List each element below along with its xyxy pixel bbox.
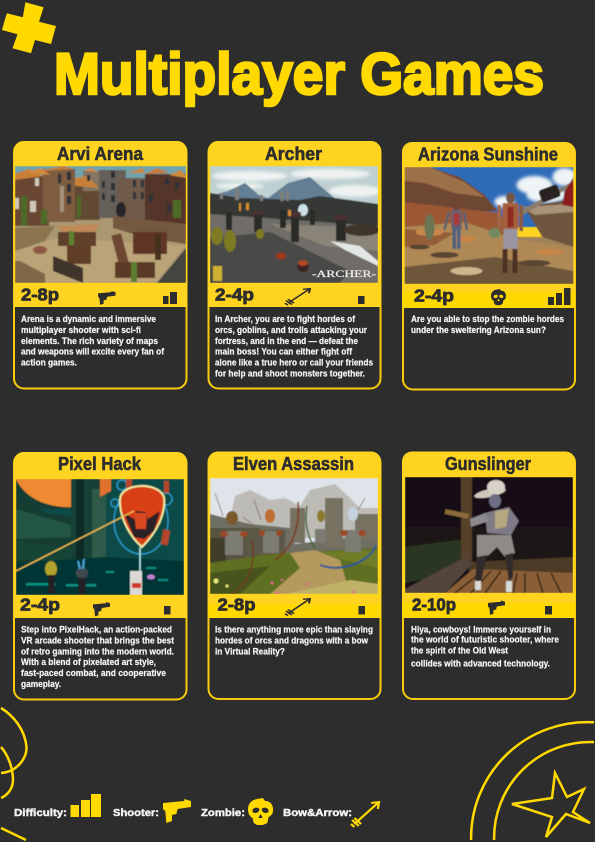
- description: [215, 314, 373, 378]
- legend: bow and arrow: Bow&Arrow:: [283, 807, 352, 819]
- description: [21, 314, 164, 368]
- heading: Gunslinger: [445, 454, 531, 474]
- description: Hiya, cowboys! Immerse yourself in: [411, 624, 551, 634]
- panel: Gunslinger: [402, 452, 575, 699]
- description: Step into PixelHack, an action-packed: [21, 624, 172, 634]
- heading: Elven Assassin: [233, 454, 354, 474]
- player count: 2-4p: [20, 595, 60, 615]
- player count: 2-4p: [215, 285, 254, 305]
- description: gameplay.: [21, 679, 61, 689]
- decorative scribble: [1, 708, 27, 840]
- icon: shooter: [488, 600, 505, 615]
- icon: shooter: [98, 291, 116, 305]
- player count: 2-8p: [21, 285, 59, 305]
- player count: 2-8p: [218, 595, 256, 615]
- description: of retro gaming into the modern world.: [21, 646, 174, 656]
- difficulty bars: [163, 292, 177, 304]
- description: Is there anything more epic than slaying: [215, 624, 373, 634]
- description: orcs, goblins, and trolls attacking your: [215, 325, 368, 335]
- description: the spirit of the Old West: [411, 646, 508, 656]
- description: alone like a true hero or call your friends: [215, 358, 373, 368]
- game image: [404, 167, 574, 284]
- game image: [16, 479, 184, 595]
- difficulty bars: [164, 606, 170, 614]
- decorative circles and star: [471, 722, 594, 840]
- description: hordes of orcs and dragons with a bow: [215, 636, 368, 646]
- panel: Arizona Sunshine: [402, 142, 576, 390]
- panel: Pixel Hack: [14, 452, 187, 700]
- legend: [14, 794, 379, 827]
- game image: [210, 478, 378, 594]
- description: under the sweltering Arizona sun?: [411, 325, 546, 335]
- difficulty bars: [545, 606, 552, 614]
- legend: shooter: [113, 799, 191, 823]
- player count: 2-10p: [412, 595, 456, 615]
- description: and weapons will excite every fan of: [21, 346, 164, 356]
- icon: shooter: [93, 602, 110, 616]
- description: the world of futuristic shooter, where: [411, 634, 559, 644]
- legend: difficulty: [14, 794, 101, 819]
- description: action games.: [21, 358, 77, 368]
- legend: zombie: [201, 798, 273, 825]
- game image: [405, 477, 573, 593]
- title: Multiplayer Games: [54, 42, 544, 107]
- description: [21, 624, 174, 689]
- legend: bow and arrow: [283, 802, 379, 827]
- description: In Archer, you are to fight hordes of: [215, 314, 355, 324]
- description: [411, 624, 559, 668]
- heading: Archer: [265, 144, 322, 164]
- icon: zombie: [491, 289, 506, 305]
- legend: shooter: Shooter:: [113, 807, 159, 819]
- panel: Elven Assassin: [208, 452, 381, 699]
- heading: Pixel Hack: [58, 454, 142, 474]
- heading: Arizona Sunshine: [418, 145, 558, 165]
- panel: Archer: [208, 141, 381, 388]
- description: With a blend of pixelated art style,: [21, 657, 156, 667]
- difficulty bars: [358, 296, 364, 304]
- description: multiplayer shooter with sci-fi: [21, 325, 141, 335]
- description: in Virtual Reality?: [215, 646, 285, 656]
- icon: bow and arrow: [285, 289, 310, 305]
- game image: [210, 166, 378, 283]
- decorative plus icon: [2, 2, 56, 53]
- description: for help and shoot monsters together.: [215, 368, 365, 378]
- description: Are you able to stop the zombie hordes: [411, 314, 564, 324]
- panel: Arvi Arena: [14, 141, 187, 388]
- icon: bow and arrow: [285, 599, 310, 616]
- description: fortress, and in the end — defeat the: [215, 336, 358, 346]
- description: VR arcade shooter that brings the best: [21, 636, 174, 646]
- watermark: -ARCHER-: [312, 269, 376, 279]
- description: Arena is a dynamic and immersive: [21, 314, 156, 324]
- legend: zombie: Zombie:: [201, 807, 245, 819]
- game image: [15, 166, 186, 283]
- description: collides with advanced technology.: [411, 658, 550, 668]
- description: fast-paced combat, and cooperative: [21, 668, 166, 678]
- description: elements. The rich variety of maps: [21, 336, 158, 346]
- player count: 2-4p: [414, 286, 454, 306]
- description: [411, 314, 564, 335]
- difficulty bars: [358, 606, 365, 614]
- description: [215, 624, 373, 656]
- legend: difficulty: Difficulty:: [14, 807, 67, 819]
- description: main boss! You can either fight off: [215, 346, 352, 356]
- heading: Arvi Arena: [57, 144, 144, 164]
- difficulty bars: [548, 288, 570, 305]
